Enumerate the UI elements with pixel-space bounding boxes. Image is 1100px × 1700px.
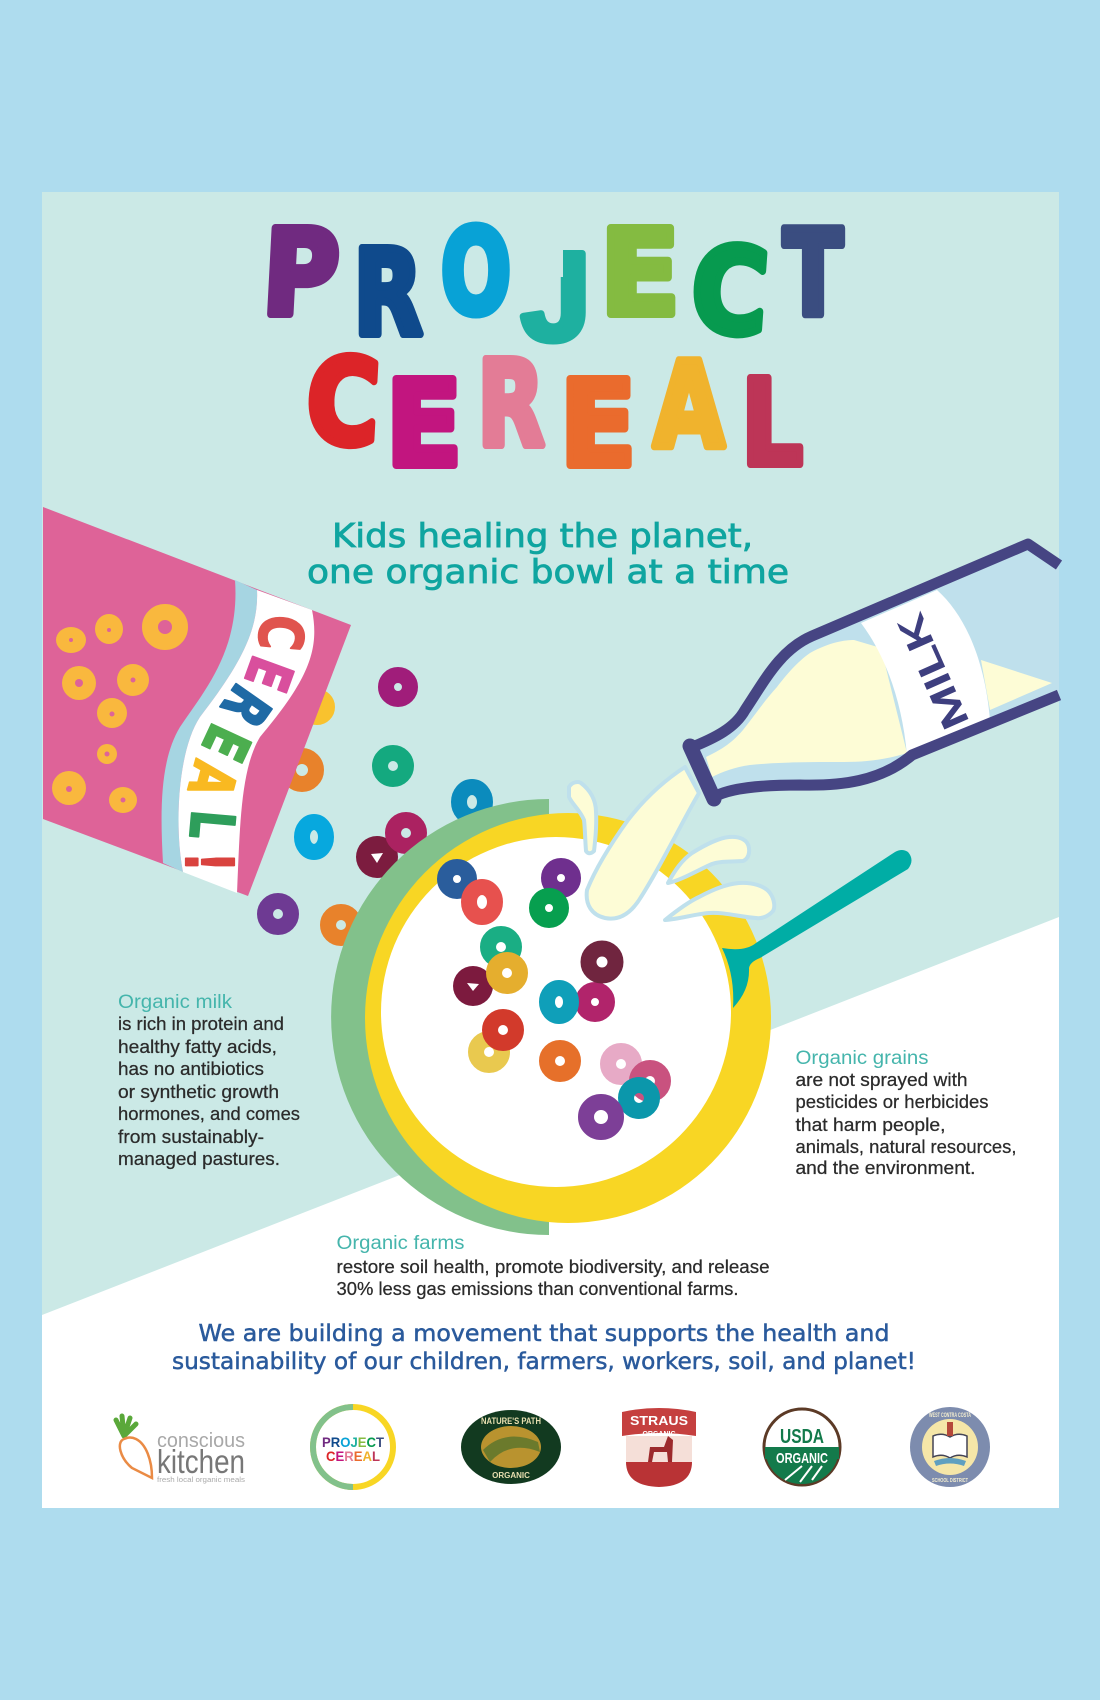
title line: PROJECT: J: [521, 228, 591, 367]
title line: PROJECT: R: [353, 225, 423, 362]
text: organic grains: pesticides or herbicides: [796, 1091, 988, 1112]
movement statement: sustainability of our children, farmers, workers, soil, and planet!: [172, 1347, 916, 1375]
bottle label: [861, 590, 990, 755]
rings partly behind the cereal box: [288, 697, 327, 784]
logo: project cereal: PROJECT: [322, 1434, 384, 1450]
text: organic grains: and the environment.: [796, 1157, 976, 1178]
milk inside bottle: [706, 640, 907, 777]
panel: poster background: [42, 192, 1059, 1508]
box label text: CEREAL!: R: [207, 672, 284, 739]
logo: usda organic: USDA: [780, 1426, 824, 1448]
text: organic milk: [118, 992, 300, 1169]
subtitle: Kids healing the planet,: [332, 516, 753, 555]
box white wave band: [179, 590, 314, 893]
splash right upper: [668, 837, 749, 883]
cereal rings in bowl: [445, 866, 663, 1132]
panel: white lower diagonal area: [42, 917, 1059, 1508]
logo: project cereal: CEREAL: [326, 1448, 380, 1464]
bottle glass: [690, 544, 1059, 797]
logo: project cereal: [313, 1407, 393, 1487]
box label text: CEREAL!: E: [187, 714, 264, 771]
logo row: [116, 1407, 990, 1487]
bowl white interior: [381, 837, 731, 1187]
logo: conscious kitchen: kitchen: [157, 1443, 245, 1480]
title line: PROJECT: P: [260, 206, 343, 343]
title line: CEREAL: A: [654, 337, 725, 474]
logo: usda organic: [764, 1409, 840, 1485]
title line: CEREAL: R: [478, 337, 544, 473]
mask for J top: [530, 235, 563, 277]
text: organic milk: healthy fatty acids,: [118, 1036, 277, 1057]
logo: nature's path organic: NATURE'S PATH: [481, 1416, 541, 1426]
logo: west contra costa unified school district: [910, 1407, 990, 1487]
box label text: CEREAL!: [169, 612, 317, 872]
logo: nature's path organic: ORGANIC: [492, 1471, 530, 1480]
title: Project Cereal: [260, 204, 843, 494]
movement statement: We are building a movement that supports the health and: [198, 1319, 889, 1347]
subtitle: one organic bowl at a time: [307, 552, 789, 591]
title line: PROJECT: C: [687, 221, 772, 363]
logo: straus organic: [622, 1408, 696, 1487]
text: organic milk: managed pastures.: [118, 1148, 280, 1169]
spoon: [722, 850, 912, 1008]
text: organic grains: are not sprayed with: [796, 1069, 968, 1090]
box blue wave band: [162, 580, 257, 872]
box body: [43, 507, 351, 896]
logo: conscious kitchen: conscious: [157, 1430, 245, 1452]
title line: CEREAL: E: [386, 356, 462, 494]
movement statement: [172, 1319, 916, 1375]
box label text: CEREAL!: !: [169, 852, 246, 872]
title line: CEREAL: L: [741, 356, 803, 492]
text: organic milk: hormones, and comes: [118, 1103, 300, 1124]
title line: CEREAL: E: [560, 356, 636, 494]
text: organic farms: 30% less gas emissions than conventional farms.: [336, 1278, 738, 1299]
text: organic milk: is rich in protein and: [118, 1013, 284, 1034]
title line: CEREAL: [303, 332, 803, 494]
cereal bowl: [331, 799, 771, 1235]
title line: CEREAL: C: [303, 332, 383, 473]
subtitle: [307, 516, 789, 591]
text: organic farms: Organic farms: [336, 1233, 464, 1254]
logo: conscious kitchen: [116, 1416, 246, 1484]
splash right lower: [665, 883, 774, 920]
box label text: CEREAL!: E: [230, 648, 306, 700]
box label text: CEREAL!: C: [244, 612, 317, 653]
logo: west contra costa unified school district: SCHOOL DISTRICT: [932, 1478, 968, 1484]
box label text: CEREAL!: A: [173, 754, 250, 805]
text: organic grains: Organic grains: [796, 1048, 928, 1069]
logo: nature's path organic: [461, 1410, 561, 1484]
bottle lip: [690, 746, 714, 799]
cereal box: [43, 507, 351, 896]
title line: PROJECT: O: [441, 204, 511, 342]
bottle outline: [690, 544, 1059, 797]
milk behind label: [981, 660, 1052, 710]
text: organic grains: animals, natural resources,: [796, 1136, 1016, 1157]
text: organic milk: or synthetic growth: [118, 1081, 279, 1102]
text: organic farms: [336, 1233, 770, 1299]
yellow rings on box: [52, 612, 180, 813]
title line: PROJECT: T: [783, 206, 843, 342]
text: organic milk: Organic milk: [118, 992, 233, 1013]
text: organic grains: that harm people,: [796, 1114, 946, 1135]
text: organic milk: from sustainably-: [118, 1126, 264, 1147]
milk stream and splashes: [569, 767, 774, 920]
milk stream: [587, 767, 699, 919]
bowl green shadow crescent: [331, 799, 549, 1235]
logo: straus organic: STRAUS: [630, 1413, 688, 1428]
text: organic milk: has no antibiotics: [118, 1058, 264, 1079]
milk bottle: [690, 544, 1059, 799]
logo: west contra costa unified school district: WEST CONTRA COSTA: [929, 1413, 971, 1419]
splash drop top: [569, 782, 596, 853]
logo: straus organic: ORGANIC: [642, 1431, 676, 1438]
title line: PROJECT: E: [600, 204, 680, 342]
falling cereal rings: [265, 675, 485, 938]
logo: usda organic: ORGANIC: [776, 1450, 828, 1467]
title line: PROJECT: [260, 204, 843, 367]
box label text: CEREAL!: L: [175, 807, 247, 842]
text: organic farms: restore soil health, promote biodiversity, and release: [336, 1256, 770, 1277]
text: organic grains: [796, 1048, 1016, 1178]
logo: conscious kitchen: fresh local organic meals: [157, 1477, 246, 1484]
label text: MILK: MILK: [890, 609, 976, 735]
bowl yellow rim: [365, 813, 771, 1223]
